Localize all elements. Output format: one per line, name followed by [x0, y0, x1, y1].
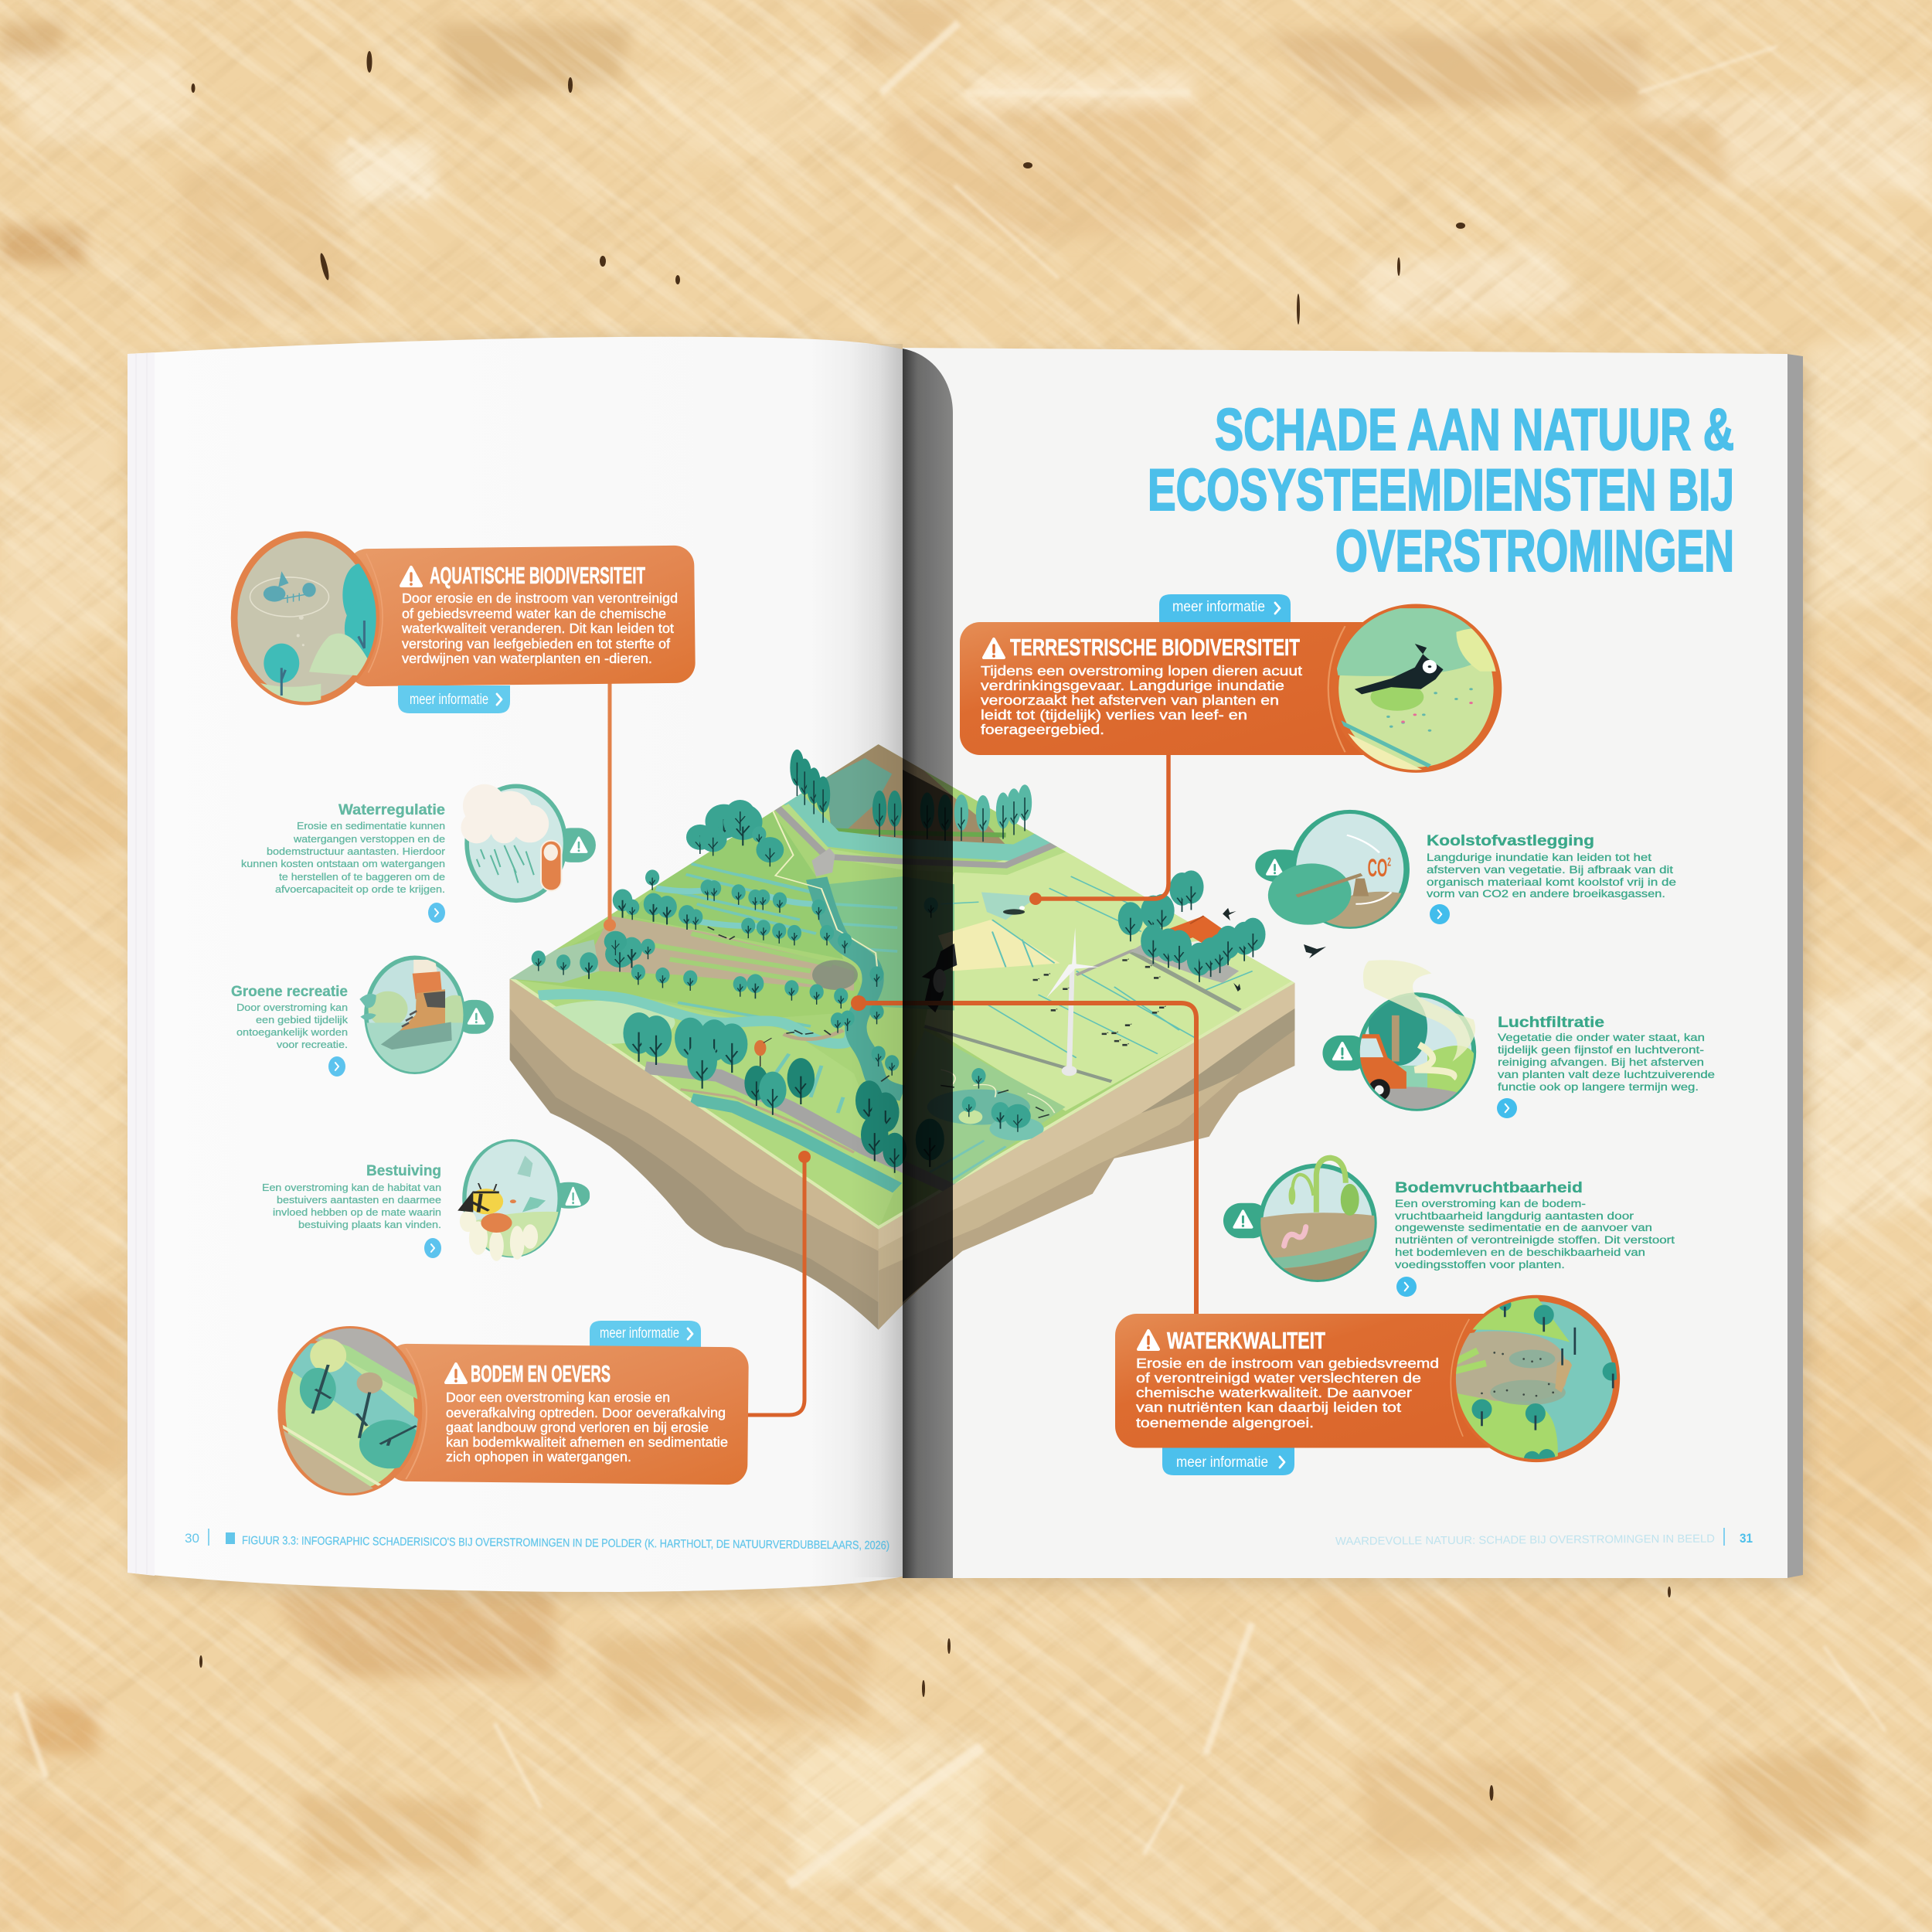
body text: het bodemleven en de beschikbaarheid van [1395, 1247, 1645, 1258]
bird: curlew on map [754, 1038, 771, 1066]
body text: kunnen kosten ontstaan om watergangen [241, 858, 445, 869]
eroded field [594, 916, 854, 991]
body text [1395, 1198, 1675, 1270]
service: bodemvruchtbaarheid [1223, 1158, 1675, 1297]
body text: voedingsstoffen voor planten. [1395, 1259, 1565, 1270]
title: SCHADE AAN NATUUR & [1215, 397, 1734, 463]
vignette: bee on flower [457, 1141, 590, 1261]
vignette: eroded bank [277, 1322, 427, 1499]
vignette: rain cloud [461, 784, 596, 900]
body text: voor recreatie. [277, 1039, 348, 1050]
more-info button [1497, 1098, 1517, 1118]
wind turbine [1046, 927, 1099, 1076]
vignette: dead fish [234, 535, 388, 707]
callout box [347, 546, 696, 686]
body text: functie ook op langere termijn weg. [1498, 1081, 1699, 1093]
body text: zich ophopen in watergangen. [446, 1449, 631, 1464]
body text: ongewenste sedimentatie en de aanvoer van [1395, 1222, 1652, 1233]
body text: of verontreinigd water verslechteren de [1136, 1370, 1421, 1386]
panel: aquatische biodiversiteit [234, 535, 696, 931]
footer: right page: 31 [1740, 1531, 1753, 1546]
map: right soil face [879, 983, 1294, 1330]
farm trees [1118, 870, 1266, 982]
meer informatie button [590, 1321, 701, 1349]
vignette: carbon release [1255, 811, 1415, 932]
service: luchtfiltratie [1322, 960, 1715, 1118]
panel: bodem en oevers [277, 1151, 811, 1499]
body text: Vegetatie die onder water staat, kan [1498, 1032, 1705, 1043]
service: bestuiving [262, 1141, 590, 1261]
map: land surface [507, 743, 1298, 1231]
body text: van planten valt deze luchtzuiverende [1498, 1069, 1715, 1080]
body text: organisch materiaal komt koolstof vrij in de [1427, 876, 1676, 888]
heading: Luchtfiltratie [1498, 1014, 1604, 1031]
meer informatie button: meer informatie [1172, 599, 1265, 615]
heading: Bodemvruchtbaarheid [1395, 1179, 1583, 1196]
service: waterregulatie [241, 784, 596, 923]
body text: afsterven van vegetatie. Bij afbraak van dit [1427, 864, 1673, 876]
heading: Bestuiving [366, 1163, 441, 1179]
body text: gaat landbouw grond verloren en bij erosie [446, 1420, 709, 1435]
body text: verdwijnen van waterplanten en -dieren. [402, 651, 652, 666]
callout box [1115, 1314, 1548, 1448]
connector line: water [851, 995, 1196, 1318]
open book: pages [128, 337, 1808, 1597]
meer informatie button: meer informatie [600, 1325, 679, 1342]
body text: te herstellen of te baggeren om de [279, 871, 445, 883]
footer: right page: WAARDEVOLLE NATUUR: SCHADE BIJ OVERSTROMINGEN IN BEELD [1335, 1533, 1715, 1548]
body text: oeverafkalving optreden. Door oeverafkalving [446, 1405, 726, 1420]
heading: Koolstofvastlegging [1427, 832, 1594, 849]
connector line: terrestrial [1029, 750, 1168, 905]
panel: waterkwaliteit [851, 995, 1621, 1475]
meer informatie button: meer informatie [410, 692, 488, 708]
heading: AQUATISCHE BIODIVERSITEIT [430, 562, 645, 589]
vignette: lapwing [1326, 607, 1504, 774]
farm roof [1148, 916, 1230, 948]
body text: nutriënten of verontreinigde stoffen. Dit verstoort [1395, 1234, 1675, 1246]
heading: WATERKWALITEIT [1167, 1327, 1325, 1354]
service: koolstofvastlegging [1255, 811, 1676, 932]
trees [532, 750, 1032, 1173]
more-info button [1430, 904, 1450, 924]
body text: Een overstroming kan de habitat van [262, 1182, 441, 1193]
body text: toenemende algengroei. [1136, 1415, 1314, 1430]
body text: ontoegankelijk worden [236, 1026, 348, 1038]
body text: afvoercapaciteit op orde te krijgen. [275, 883, 445, 895]
warning icon [446, 1364, 466, 1383]
farmhouse walls [1165, 940, 1215, 955]
body text: veroorzaakt het afsterven van planten en [981, 692, 1279, 708]
title [1148, 397, 1734, 584]
body text: verstoring van leefgebieden en tot sterfte of [402, 636, 670, 651]
meer informatie button: meer informatie [1176, 1454, 1268, 1471]
hill and dike [826, 744, 1005, 844]
footer: right page [1335, 1528, 1753, 1548]
vignette: car and smog [1322, 960, 1481, 1116]
body text [236, 1002, 349, 1050]
warning icon [401, 567, 421, 586]
body text [1498, 1032, 1715, 1093]
body text: Door overstroming kan [236, 1002, 348, 1013]
body text [241, 820, 446, 895]
body text: een gebied tijdelijk [256, 1014, 349, 1026]
rivers [539, 994, 852, 1043]
footer: left page: 30 [185, 1531, 199, 1546]
heading: BODEM EN OEVERS [471, 1360, 611, 1387]
body text [1427, 852, 1676, 900]
title: OVERSTROMINGEN [1335, 519, 1734, 584]
footer: left page: FIGUUR 3.3: INFOGRAPHIC SCHADERISICO'S BIJ OVERSTROMINGEN IN DE POLDER (K. HARTHOLT, DE NATUURVERDUBBELAARS, 2026) [242, 1534, 889, 1553]
warning icon [984, 639, 1004, 658]
body text: verdrinkingsgevaar. Langdurige inundatie [981, 678, 1284, 693]
label: CO2: 2 [1387, 855, 1391, 869]
body text: bestuiving plaats kan vinden. [298, 1219, 441, 1230]
heading: Waterregulatie [338, 802, 445, 818]
body text [446, 1389, 728, 1464]
connector line: bodem [742, 1151, 811, 1415]
spine shadow cast across the gutter [850, 344, 953, 1578]
warning icon [1138, 1331, 1158, 1349]
body text: invloed hebben op de mate waarin [273, 1206, 441, 1218]
connector line: aquatic [604, 680, 616, 931]
body text: bodemstructuur aantasten. Hierdoor [267, 845, 446, 857]
vignette: soil and worm [1223, 1158, 1381, 1287]
callout box [386, 1344, 749, 1485]
more-info button [424, 1238, 441, 1258]
body text: Door erosie en de instroom van verontreinigd [402, 590, 678, 606]
callout box [960, 622, 1423, 755]
body text: bestuivers aantasten en daarmee [277, 1194, 441, 1206]
body text: Door een overstroming kan erosie en [446, 1389, 670, 1405]
body text: Tijdens een overstroming lopen dieren acuut [981, 663, 1302, 679]
vignette: hiking boot [359, 957, 494, 1078]
soaring bird [922, 944, 957, 1012]
cows [1033, 958, 1165, 1046]
service: groene recreatie [231, 957, 494, 1078]
body text [981, 663, 1302, 737]
body text: tijdelijk geen fijnstof en luchtveront- [1498, 1044, 1704, 1056]
small birds near farm [1223, 908, 1240, 992]
body text: waterkwaliteit veranderen. Dit kan leiden tot [401, 621, 674, 636]
body text: kan bodemkwaliteit afnemen en sedimentatie [446, 1434, 728, 1450]
more-info button [428, 903, 445, 923]
meer informatie button [1162, 1447, 1294, 1475]
body text: watergangen verstoppen en de [293, 833, 445, 845]
body text: chemische waterkwaliteit. De aanvoer [1136, 1385, 1412, 1400]
body text: vorm van CO2 en andere broeikasgassen. [1427, 888, 1665, 900]
heading: TERRESTRISCHE BIODIVERSITEIT [1010, 634, 1300, 661]
body text: Een overstroming kan de bodem- [1395, 1198, 1586, 1209]
yellow fields right [938, 920, 1060, 971]
body text [401, 590, 678, 666]
body text: leidt tot (tijdelijk) verlies van leef- en [981, 707, 1247, 723]
swallow [1304, 944, 1326, 958]
more-info button [1396, 1277, 1417, 1297]
body text: of gebiedsvreemd water kan de chemische [402, 606, 666, 621]
meer informatie button [398, 685, 510, 713]
map: left soil face [510, 979, 879, 1330]
panel: terrestrische biodiversiteit [960, 594, 1504, 905]
body text [1136, 1355, 1439, 1430]
more-info button [328, 1056, 345, 1077]
road and lower canal [645, 1068, 951, 1188]
fallen branches [708, 927, 1049, 1117]
body text: reiniging afvangen. Bij het afsterven [1498, 1056, 1704, 1068]
body text [262, 1182, 441, 1230]
body text: Erosie en de instroom van gebiedsvreemd [1136, 1355, 1439, 1371]
body text: foerageergebied. [981, 722, 1104, 737]
body text: Langdurige inundatie kan leiden tot het [1427, 852, 1651, 863]
ditches [575, 864, 897, 1113]
bird: lapwing on map [1003, 906, 1025, 915]
body text: van nutriënten kan daarbij leiden tot [1136, 1400, 1401, 1415]
isometric polder map block [507, 743, 1298, 1330]
body text: Erosie en sedimentatie kunnen [297, 820, 445, 832]
meer informatie button [1159, 594, 1291, 623]
footer: left page [185, 1529, 889, 1553]
wet meadow [552, 1000, 675, 1044]
body text: vruchtbaarheid langdurig aantasten door [1395, 1210, 1634, 1222]
wetland lower right [886, 1030, 1066, 1184]
heading: Groene recreatie [231, 984, 348, 1000]
label: CO2: CO [1368, 855, 1387, 883]
vignette: algae water [1451, 1296, 1621, 1468]
